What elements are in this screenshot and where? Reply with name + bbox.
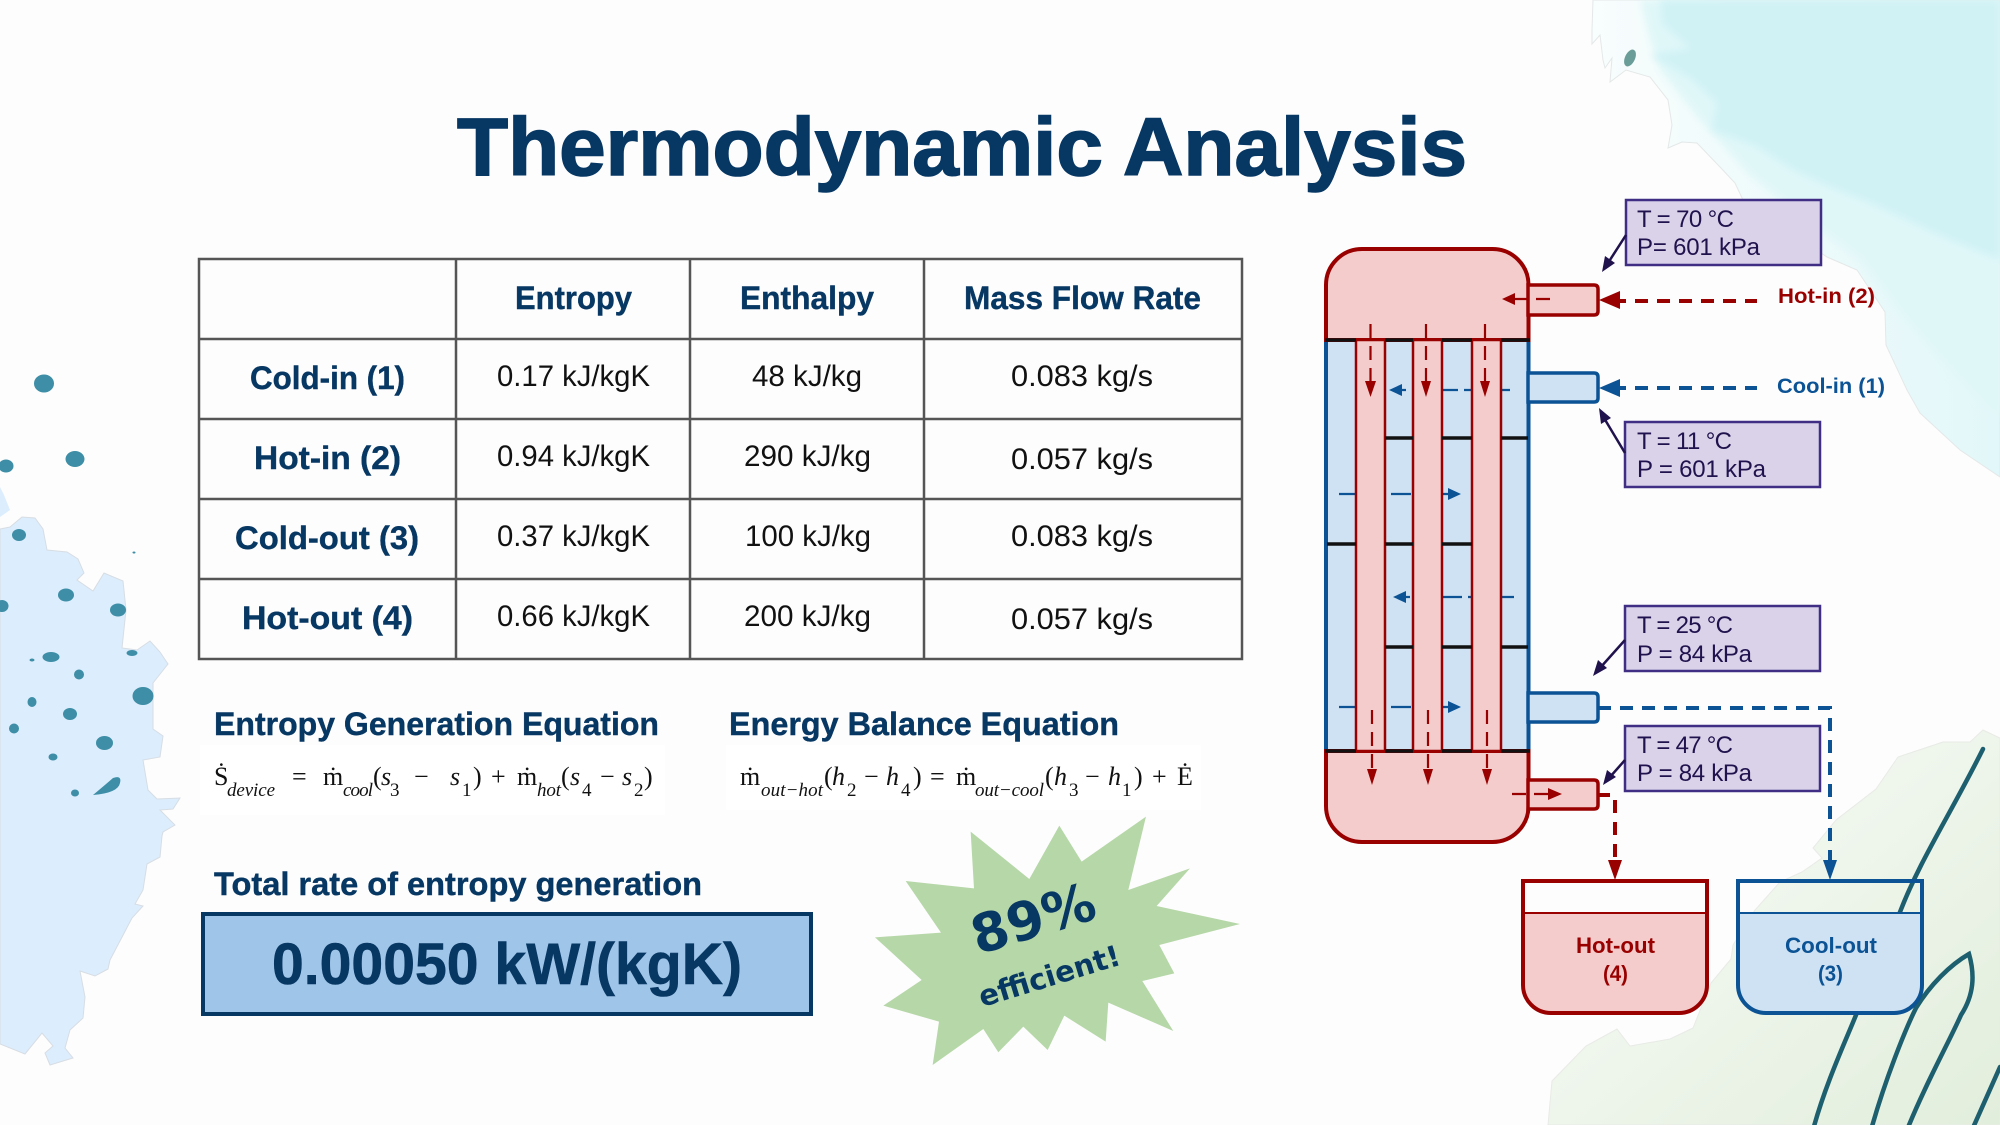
heading: total rate of entropy generation: Total rate of entropy generation — [214, 866, 702, 902]
equation: entropy generation: ṁ — [323, 762, 343, 791]
arrow: cool-out to tank — [1598, 708, 1837, 880]
tank: hot-out — [1523, 881, 1707, 1013]
heading: energy balance equation: Energy Balance Equation — [729, 706, 1119, 742]
table header row: Enthalpy — [740, 280, 874, 316]
background: green watercolor splash bottom right — [1548, 730, 2000, 1125]
mass flow rate column values: 0.057 kg/s — [1011, 603, 1153, 636]
equation: entropy generation: ṁ — [517, 762, 537, 791]
callout: cool-in conditions — [1599, 408, 1820, 487]
equation: entropy generation: + — [491, 762, 506, 791]
nozzle: hot-in — [1528, 285, 1598, 315]
entropy column values — [497, 360, 650, 633]
equation: entropy generation: 1 — [462, 780, 472, 801]
equation: energy balance: h — [1054, 762, 1067, 791]
callout: hot-in conditions: T = 70 °C — [1637, 206, 1734, 233]
callout: cool-out conditions: P = 84 kPa — [1637, 641, 1753, 668]
equation: entropy generation: 2 — [634, 780, 644, 801]
result box: total entropy generation value — [203, 914, 811, 1014]
equation: energy balance: ṁ — [740, 762, 760, 791]
background: teal watercolor splash top right — [1592, 0, 2000, 477]
equation: entropy generation: hot — [537, 780, 562, 801]
equation: entropy generation: − — [600, 762, 615, 791]
tank: cool-out — [1738, 881, 1922, 1013]
heading: entropy generation equation: Entropy Generation Equation — [214, 706, 659, 742]
entropy column values: 0.17 kJ/kgK — [497, 360, 650, 393]
tubes — [1356, 340, 1501, 751]
top header — [1326, 249, 1528, 340]
entropy column values: 0.37 kJ/kgK — [497, 520, 650, 553]
equation: energy balance: 1 — [1122, 780, 1132, 801]
entropy column values: 0.94 kJ/kgK — [497, 440, 650, 473]
equation: entropy generation — [200, 745, 665, 815]
starburst callout: 89% efficient: efficient! — [974, 938, 1124, 1014]
tank: cool-out: Cool-out — [1785, 933, 1878, 958]
equation: energy balance: ) — [1134, 762, 1143, 791]
equation: energy balance: h — [886, 762, 899, 791]
enthalpy column values: 48 kJ/kg — [752, 360, 862, 393]
equation: energy balance: out−hot — [761, 780, 824, 801]
bottom header — [1326, 751, 1528, 842]
callout: cool-out conditions — [1593, 606, 1820, 676]
equation: entropy generation: Ṡ — [214, 762, 228, 791]
equation: entropy generation: s — [570, 762, 580, 791]
table row labels: Hot-in (2) — [254, 440, 401, 476]
equation: entropy generation: = — [292, 762, 307, 791]
table: stream properties — [199, 259, 1242, 659]
enthalpy column values: 100 kJ/kg — [745, 520, 871, 553]
equation: entropy generation: − — [414, 762, 429, 791]
mass flow rate column values: 0.057 kg/s — [1011, 443, 1153, 476]
tank: hot-out: (4) — [1603, 961, 1628, 986]
equation: entropy generation: ( — [561, 762, 570, 791]
equation: energy balance: 3 — [1069, 780, 1078, 801]
enthalpy column values: 290 kJ/kg — [744, 440, 871, 473]
equation: energy balance: − — [864, 762, 879, 791]
equation: entropy generation: ( — [373, 762, 382, 791]
diagram: shell and tube heat exchanger — [1325, 249, 1598, 842]
entropy column values: 0.66 kJ/kgK — [497, 600, 650, 633]
equation: energy balance: h — [1108, 762, 1121, 791]
callout: hot-out conditions: T = 47 °C — [1637, 732, 1733, 759]
shell side — [1326, 340, 1528, 751]
baffles — [1325, 340, 1530, 751]
mass flow rate column values — [1011, 360, 1153, 636]
callout: hot-out conditions: P = 84 kPa — [1637, 760, 1753, 787]
tank: cool-out: (3) — [1818, 961, 1843, 986]
equation: energy balance: ) — [913, 762, 922, 791]
result box: total entropy generation value: 0.00050 kW/(kgK) — [272, 932, 742, 997]
equation: energy balance: = — [930, 762, 945, 791]
equation: entropy generation: device — [227, 780, 275, 801]
table header row: Entropy — [515, 280, 632, 316]
equation: entropy generation: ) — [644, 762, 653, 791]
background: blue splash with teal droplets on left — [0, 374, 180, 1065]
mass flow rate column values: 0.083 kg/s — [1011, 360, 1153, 393]
enthalpy column values: 200 kJ/kg — [744, 600, 871, 633]
equation: energy balance — [726, 745, 1201, 810]
callout: hot-in conditions: P= 601 kPa — [1637, 234, 1761, 261]
internal cold flow arrows — [1339, 384, 1514, 713]
table header row: Mass Flow Rate — [964, 280, 1201, 316]
equation: energy balance: 2 — [847, 780, 856, 801]
equation: energy balance: out−cool — [975, 780, 1044, 801]
equation: entropy generation: 4 — [582, 780, 592, 801]
arrow: cool-in feed — [1599, 379, 1757, 397]
callout: cool-out conditions: T = 25 °C — [1637, 612, 1733, 639]
starburst callout: 89% efficient: 89% — [964, 872, 1103, 967]
table row labels: Hot-out (4) — [242, 600, 413, 636]
table row labels: Cold-out (3) — [235, 520, 419, 556]
table row labels: Cold-in (1) — [250, 360, 405, 396]
label: cool-in: Cool-in (1) — [1777, 375, 1885, 398]
table header row — [515, 280, 1201, 316]
callout: cool-in conditions: T = 11 °C — [1637, 428, 1732, 455]
internal hot flow arrows — [1365, 293, 1562, 800]
equation: energy balance: ( — [1045, 762, 1054, 791]
equation: energy balance: Ė — [1177, 762, 1193, 791]
equation: energy balance: − — [1085, 762, 1100, 791]
arrow: hot-out to tank — [1598, 795, 1622, 880]
equation: energy balance: 4 — [901, 780, 911, 801]
equation: entropy generation: ) — [473, 762, 482, 791]
starburst callout: 89% efficient — [875, 817, 1240, 1065]
callout: hot-in conditions — [1602, 200, 1821, 272]
equation: energy balance: + — [1152, 762, 1167, 791]
equation: entropy generation: cool — [343, 780, 373, 801]
equation: energy balance: ṁ — [956, 762, 976, 791]
arrow: hot-in feed — [1599, 291, 1757, 309]
equation: entropy generation: s — [450, 762, 460, 791]
nozzle: cool-out — [1528, 693, 1598, 722]
background: teal leaf line art — [1813, 749, 2000, 1125]
nozzle: hot-out — [1528, 780, 1598, 809]
table row labels — [235, 360, 419, 636]
equation: entropy generation: s — [622, 762, 632, 791]
equation: energy balance: h — [832, 762, 845, 791]
label: hot-in: Hot-in (2) — [1778, 285, 1875, 308]
enthalpy column values — [744, 360, 871, 633]
nozzle: cool-in — [1528, 373, 1598, 402]
mass flow rate column values: 0.083 kg/s — [1011, 520, 1153, 553]
callout: hot-out conditions — [1603, 726, 1820, 791]
equation: entropy generation: 3 — [390, 780, 400, 801]
tank: hot-out: Hot-out — [1576, 933, 1656, 958]
callout: cool-in conditions: P = 601 kPa — [1637, 456, 1767, 483]
title: Thermodynamic Analysis — [457, 102, 1467, 193]
equation: energy balance: ( — [824, 762, 833, 791]
equation: entropy generation: s — [381, 762, 391, 791]
